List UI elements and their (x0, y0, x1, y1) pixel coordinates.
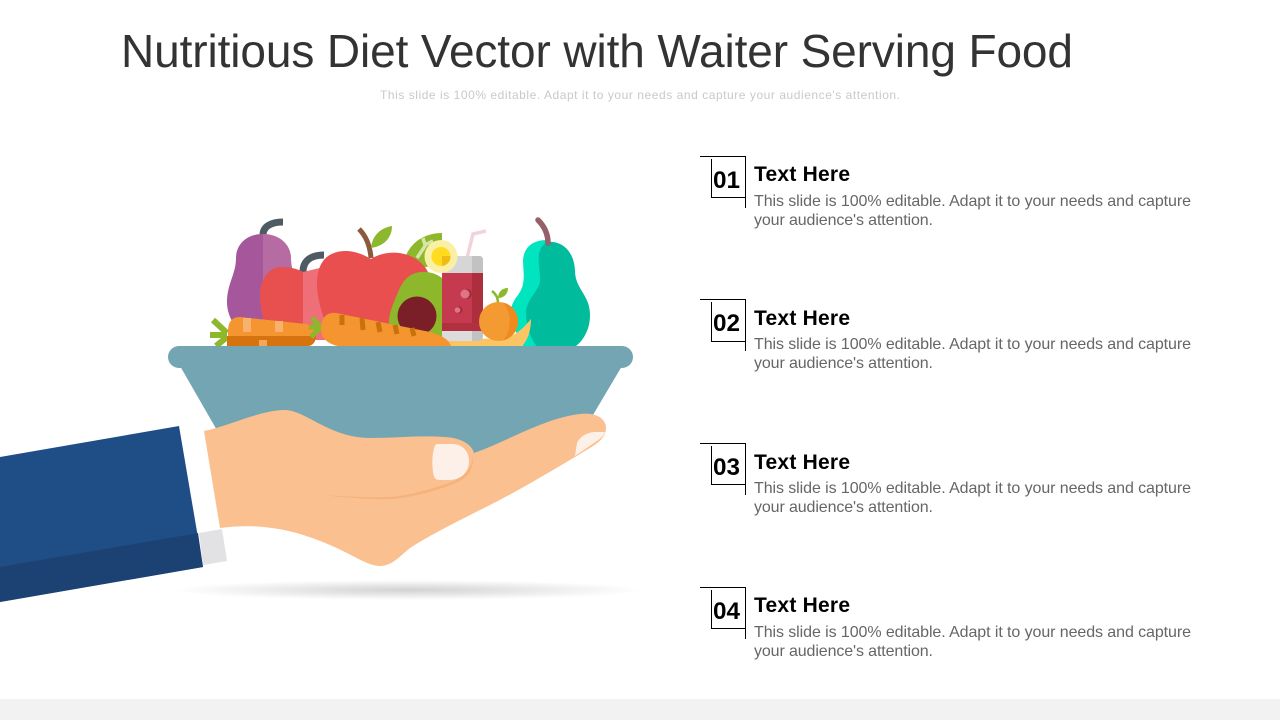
icon: lime slice (405, 233, 442, 268)
body text 04 (754, 624, 1191, 660)
palm crease (318, 455, 473, 499)
item 04 (700, 588, 1191, 660)
shadow under hand (172, 580, 644, 600)
bowl (168, 346, 633, 456)
heading 04: Text Here (754, 594, 850, 617)
cuff (199, 529, 227, 565)
body text 03: your audience's attention. (754, 499, 933, 516)
icon: avocado (389, 272, 442, 346)
number badge 04 (700, 588, 746, 639)
icon: banana (446, 319, 531, 346)
icon: small carrot (210, 317, 321, 346)
number badge 04: 04 (713, 598, 741, 625)
body text 02: your audience's attention. (754, 355, 933, 372)
heading 02: Text Here (754, 307, 850, 330)
icon: purple pear (227, 222, 300, 340)
food pile (210, 220, 590, 350)
illustration: hand holding a bowl of food (0, 220, 644, 602)
body text 01: This slide is 100% editable. Adapt it to your needs and capture (754, 193, 1191, 210)
number badge 01 (700, 156, 746, 208)
subtitle: This slide is 100% editable. Adapt it to your needs and capture your audience's attention. (380, 88, 900, 102)
item 03 (700, 444, 1191, 516)
icon: juice glass (442, 231, 486, 341)
heading 03: Text Here (754, 451, 850, 474)
icon: orange (479, 288, 518, 341)
heading 01: Text Here (754, 163, 850, 186)
icon: flower slice (424, 240, 458, 273)
title: Nutritious Diet Vector with Waiter Serving Food (121, 25, 1073, 77)
body text 03 (754, 480, 1191, 516)
body text 02 (754, 336, 1191, 372)
icon: large carrot (321, 313, 451, 346)
icon: apple (317, 226, 428, 346)
number badge 01: 01 (713, 167, 740, 194)
icon: red pepper (260, 255, 330, 340)
number badge 02: 02 (713, 310, 740, 337)
hand (204, 410, 606, 566)
footer band (0, 699, 1280, 720)
number badge 03: 03 (713, 454, 740, 481)
fingernail (575, 432, 605, 456)
item 02 (700, 300, 1191, 372)
body text 01: your audience's attention. (754, 212, 933, 229)
item 01 (700, 156, 1191, 229)
body text 04: This slide is 100% editable. Adapt it to your needs and capture (754, 624, 1191, 641)
number badge 02 (700, 300, 746, 351)
body text 04: your audience's attention. (754, 643, 933, 660)
body text 02: This slide is 100% editable. Adapt it to your needs and capture (754, 336, 1191, 353)
thumbnail (432, 444, 469, 480)
number badge 03 (700, 444, 746, 495)
sleeve (0, 426, 203, 602)
icon: teal pear (511, 220, 590, 350)
body text 03: This slide is 100% editable. Adapt it to your needs and capture (754, 480, 1191, 497)
body text 01 (754, 193, 1191, 229)
